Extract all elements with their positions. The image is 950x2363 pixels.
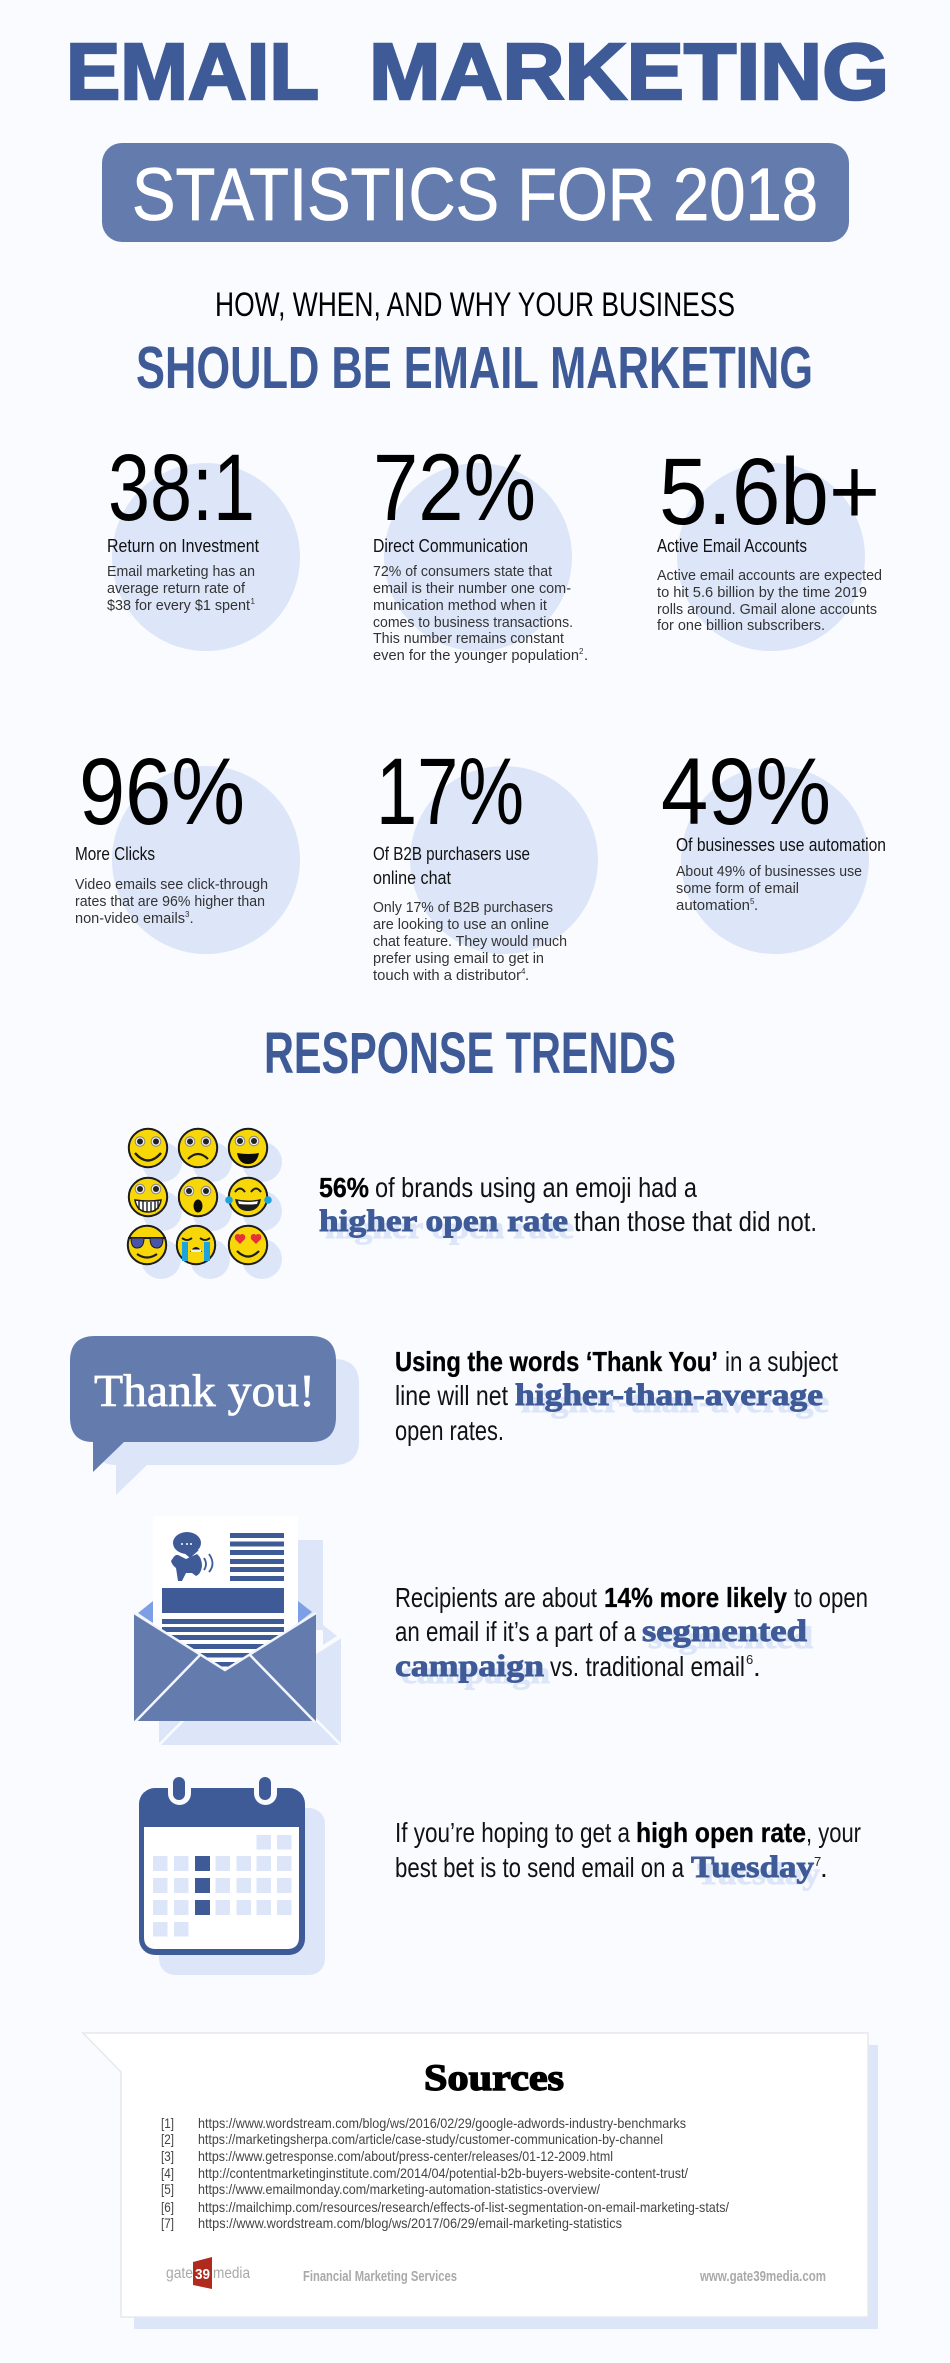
stat: direct communication xyxy=(373,435,588,664)
text: tuesday: , your xyxy=(806,1817,861,1848)
text: emoji open rate: of brands using an emoji had a xyxy=(375,1172,697,1203)
stat: active email accounts: rolls around. Gmail alone accounts xyxy=(657,601,877,618)
text: emoji open rate: higher open rate xyxy=(319,1203,568,1238)
stat: businesses use automation: Of businesses use automation xyxy=(676,834,886,855)
icon: calendar xyxy=(139,1776,325,1975)
stat: active email accounts: Active email accounts are expected xyxy=(657,567,882,584)
stat: return on investment: 1 xyxy=(250,597,256,606)
text: emoji open rate: than those that did not. xyxy=(574,1206,817,1237)
stat: direct communication: . xyxy=(584,647,588,664)
stat: more clicks: non-video emails xyxy=(75,910,185,927)
emoji: frown xyxy=(179,1129,217,1167)
sources list: [4] xyxy=(161,2165,174,2181)
stat: B2B online chat: Only 17% of B2B purchasers xyxy=(373,899,553,916)
stat: direct communication: munication method when it xyxy=(373,597,548,614)
stat: active email accounts: to hit 5.6 billion by the time 2019 xyxy=(657,584,867,601)
stat: direct communication: email is their number one com- xyxy=(373,580,571,597)
stat: more clicks: rates that are 96% higher than xyxy=(75,893,265,910)
text: thank you subject line: higher-than-average xyxy=(521,1384,829,1419)
subtitle line: HOW, WHEN, AND WHY YOUR BUSINESS xyxy=(215,286,735,324)
text: thank you subject line: line will net xyxy=(395,1380,508,1411)
sources list: [6] xyxy=(161,2199,174,2215)
stat: more clicks: . xyxy=(190,910,194,927)
title xyxy=(66,27,889,116)
stat: return on investment: average return rate of xyxy=(107,580,246,597)
text: thank you subject line: Using the words ‘Thank You’ xyxy=(395,1346,718,1377)
stat: return on investment: $38 for every $1 spent xyxy=(107,597,251,614)
stat: B2B online chat: prefer using email to get in xyxy=(373,950,544,967)
stat: direct communication: comes to business transactions. xyxy=(373,614,573,631)
sources list: https://www.emailmonday.com/marketing-automation-statistics-overview/ xyxy=(198,2181,600,2197)
stat: B2B online chat: Of B2B purchasers use xyxy=(373,843,530,864)
emoji: sunglasses xyxy=(128,1226,166,1264)
text: tuesday: Tuesday xyxy=(691,1849,815,1884)
text: segmented campaign: an email if it’s a part of a xyxy=(395,1616,636,1647)
stat: return on investment: 38:1 xyxy=(108,435,255,541)
title: MARKETING xyxy=(369,27,889,116)
text: emoji open rate xyxy=(319,1172,817,1245)
stat: B2B online chat: 17% xyxy=(376,739,524,845)
stat: B2B online chat: . xyxy=(525,967,529,984)
sources list: http://contentmarketinginstitute.com/2014/04/potential-b2b-buyers-website-content-trust/ xyxy=(198,2165,688,2181)
text: segmented campaign: segmented xyxy=(648,1620,813,1655)
text: thank you subject line: in a subject xyxy=(725,1346,838,1377)
stat: direct communication: 2 xyxy=(579,647,584,656)
sources list: https://www.wordstream.com/blog/ws/2017/06/29/email-marketing-statistics xyxy=(198,2215,622,2231)
stat: direct communication: even for the younger population xyxy=(373,647,579,664)
stat: businesses use automation: some form of email xyxy=(676,880,799,897)
text: segmented campaign: Recipients are about xyxy=(395,1582,597,1613)
text: segmented campaign: campaign xyxy=(395,1648,544,1683)
tagline: Financial Marketing Services xyxy=(303,2268,457,2285)
sources list: [2] xyxy=(161,2131,174,2147)
emoji: crying xyxy=(177,1226,215,1264)
sources list xyxy=(161,2115,729,2231)
emoji: open smile xyxy=(229,1129,267,1167)
stat: return on investment xyxy=(107,435,300,651)
stat: active email accounts: Active Email Accounts xyxy=(657,535,807,556)
stat: more clicks: Video emails see click-through xyxy=(75,876,268,893)
emoji: surprised xyxy=(179,1178,217,1216)
sources list: [3] xyxy=(161,2148,174,2164)
text: tuesday: high open rate xyxy=(636,1817,806,1848)
icon: emoji grid xyxy=(128,1129,282,1279)
banner: statistics for 2018: STATISTICS FOR 2018 xyxy=(132,153,818,236)
logo: gate39media xyxy=(166,2257,250,2289)
stat: direct communication: 72% of consumers state that xyxy=(373,563,553,580)
stat: B2B online chat: 4 xyxy=(521,967,526,976)
text: emoji open rate: higher open rate xyxy=(325,1210,574,1245)
calendar day grid xyxy=(153,1835,292,1936)
icon: thank you speech bubble xyxy=(70,1336,359,1495)
stat: return on investment: Email marketing has an xyxy=(107,563,255,580)
stat: direct communication: Direct Communication xyxy=(373,535,528,556)
text: segmented campaign: segmented xyxy=(642,1613,807,1648)
logo: gate39media: gate xyxy=(166,2265,193,2282)
text: segmented campaign: . xyxy=(753,1651,761,1682)
heading: response trends: RESPONSE TRENDS xyxy=(264,1021,676,1086)
stat: B2B online chat xyxy=(373,739,598,984)
stat: B2B online chat: are looking to use an online xyxy=(373,916,549,933)
sources list: https://marketingsherpa.com/article/case-study/customer-communication-by-channel xyxy=(198,2131,663,2147)
icon: open envelope with letter xyxy=(134,1516,341,1745)
stat: more clicks xyxy=(75,739,300,954)
stat: more clicks: 3 xyxy=(185,910,190,919)
stat: active email accounts: 5.6b+ xyxy=(659,439,880,545)
sources list: https://www.getresponse.com/about/press-center/releases/01-12-2009.html xyxy=(198,2148,613,2164)
stat: B2B online chat: chat feature. They would much xyxy=(373,933,567,950)
stat: businesses use automation: 49% xyxy=(661,739,831,845)
title: EMAIL xyxy=(66,27,319,116)
sources list: [1] xyxy=(161,2115,174,2131)
sources heading: Sources xyxy=(424,2058,564,2099)
text: tuesday: best bet is to send email on a xyxy=(395,1852,684,1883)
text: thank you subject line: higher-than-average xyxy=(515,1377,823,1412)
text: tuesday: If you’re hoping to get a xyxy=(395,1817,630,1848)
text: segmented campaign: campaign xyxy=(401,1655,550,1690)
text: tuesday: Tuesday xyxy=(697,1856,821,1891)
emoji: toothy grin xyxy=(129,1178,167,1216)
sources list: https://mailchimp.com/resources/research/effects-of-list-segmentation-on-email-marketing-stats/ xyxy=(198,2199,729,2215)
text: segmented campaign: to open xyxy=(794,1582,868,1613)
sources list: [7] xyxy=(161,2215,174,2231)
stat: businesses use automation: . xyxy=(754,897,758,914)
emoji: smile xyxy=(129,1129,167,1167)
logo: gate39media: 39 xyxy=(195,2266,210,2283)
icon: thank you speech bubble: Thank you! xyxy=(94,1365,315,1416)
stat: direct communication: This number remains constant xyxy=(373,630,565,647)
panel: sources xyxy=(83,2033,878,2329)
text: segmented campaign: vs. traditional email xyxy=(550,1651,745,1682)
stat: direct communication: 72% xyxy=(373,435,536,541)
stat: B2B online chat: online chat xyxy=(373,867,451,888)
logo: gate39media: media xyxy=(213,2265,250,2282)
sources list: https://www.wordstream.com/blog/ws/2016/02/29/google-adwords-industry-benchmarks xyxy=(198,2115,686,2131)
sources list: [5] xyxy=(161,2181,174,2197)
text: segmented campaign xyxy=(395,1582,868,1690)
stat: businesses use automation: About 49% of businesses use xyxy=(676,863,862,880)
text: tuesday: . xyxy=(820,1852,828,1883)
stat: businesses use automation: automation xyxy=(676,897,750,914)
stat: more clicks: 96% xyxy=(79,739,245,845)
text: segmented campaign: 6 xyxy=(746,1652,753,1667)
text: tuesday xyxy=(395,1817,861,1891)
stat: active email accounts: for one billion subscribers. xyxy=(657,617,825,634)
stat: more clicks: More Clicks xyxy=(75,843,155,864)
emoji: heart eyes xyxy=(229,1226,267,1264)
text: emoji open rate: 56% xyxy=(319,1172,369,1203)
emoji: laughing with tears xyxy=(225,1178,272,1216)
icon: person speaking xyxy=(171,1532,212,1581)
website: www.gate39media.com xyxy=(699,2268,826,2285)
stat: active email accounts xyxy=(657,439,882,651)
text: tuesday: 7 xyxy=(814,1854,821,1869)
text: thank you subject line: open rates. xyxy=(395,1415,504,1446)
stat: B2B online chat: touch with a distributor xyxy=(373,967,521,984)
stat: businesses use automation: 5 xyxy=(750,897,755,906)
text: thank you subject line xyxy=(395,1346,838,1446)
text: segmented campaign: 14% more likely xyxy=(604,1582,787,1613)
stat: businesses use automation xyxy=(661,739,886,954)
stat: return on investment: Return on Investment xyxy=(107,535,259,556)
